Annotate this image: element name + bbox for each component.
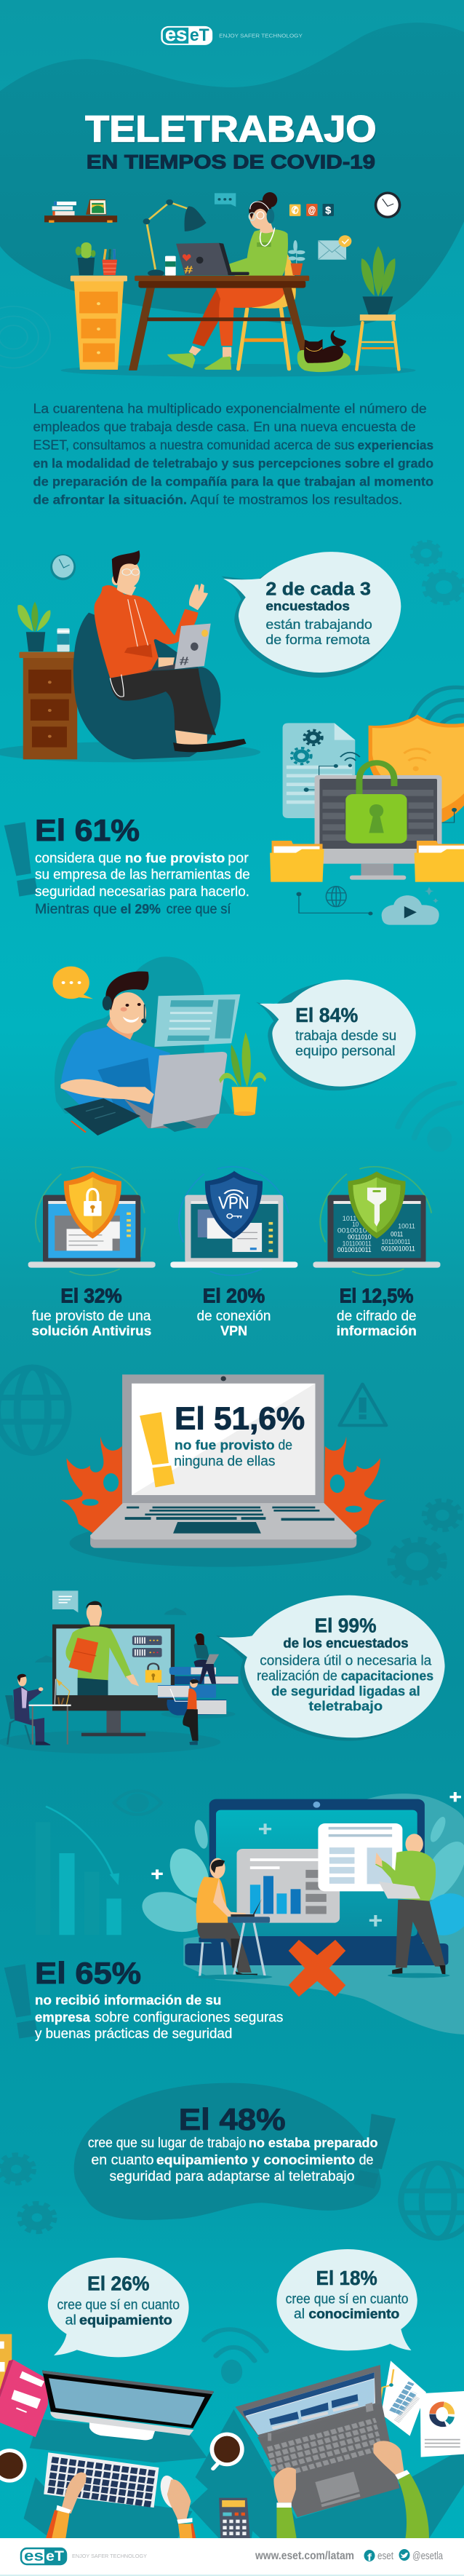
speech bubble: están trabajando [265, 617, 372, 632]
section: 65% [4, 1791, 464, 2041]
flame holes [82, 1473, 362, 1513]
monitor [52, 1625, 175, 1736]
laptop encryption: 101100011 [381, 1239, 411, 1246]
desk [129, 276, 309, 370]
woman standing [170, 1679, 199, 1745]
percent heading: El 51,6% [175, 1401, 305, 1436]
plus signs [151, 1792, 461, 1927]
description: no recibió información de su [35, 1993, 221, 2008]
speech bubble left: equipamiento [79, 2313, 172, 2328]
speech bubble: trabaja desde su [295, 1029, 396, 1043]
shadow [70, 1519, 372, 1567]
section: security tools [0, 1167, 440, 1453]
website: www.eset.com/latam [255, 2550, 354, 2562]
description: su empresa de las herramientas de [35, 868, 250, 882]
laptop [176, 243, 249, 276]
man with hoodie and laptop: # [180, 655, 189, 667]
faint eye [114, 1791, 161, 1815]
intro paragraph: de afrontar la situación. [33, 493, 187, 507]
desk lamp [143, 199, 207, 277]
title: TELETRABAJO [87, 109, 377, 151]
dark blob [55, 956, 233, 1114]
section: 99% [0, 1590, 445, 1753]
leaves left [135, 1819, 216, 1940]
speech bubble right: al [294, 2307, 305, 2321]
faint wifi [398, 1083, 460, 1138]
shelf with books and frame [44, 199, 117, 223]
faint gears [391, 1501, 460, 1582]
percent heading: El 65% [35, 1956, 141, 1990]
left hand on keyboard [46, 2473, 87, 2538]
cactus [76, 242, 95, 275]
percent heading: El 61% [35, 813, 140, 847]
faint wifi [204, 2329, 266, 2361]
intro paragraph: experiencias [358, 438, 433, 453]
laptop screen [122, 1374, 324, 1505]
description: considera que [35, 851, 121, 865]
security shield [369, 715, 464, 823]
globe icon [326, 887, 346, 907]
chat note [52, 1590, 78, 1612]
stats labels: El 32% [60, 1284, 122, 1307]
speech bubble left: El 26% [87, 2272, 149, 2295]
rings decoration [0, 306, 50, 368]
subtitle: EN TIEMPOS DE COVID-19 [87, 151, 375, 173]
stats labels [32, 1284, 151, 1339]
description: en cuanto [91, 2152, 154, 2168]
speech bubble: capacitaciones [341, 1668, 433, 1684]
faint globe [401, 2163, 464, 2238]
speech bubble: de forma remota [265, 633, 370, 647]
filing cabinet [71, 276, 127, 370]
header section [0, 23, 464, 377]
intro paragraph: Aquí te mostramos los resultados. [191, 493, 402, 507]
description: Mientras que [35, 902, 117, 916]
stats labels: solución Antivirus [32, 1324, 151, 1339]
footer [0, 2538, 464, 2576]
floor shadows [196, 1973, 449, 1979]
stat vpn: VPN [220, 1324, 247, 1339]
section: desks [0, 2249, 464, 2538]
description [35, 1993, 283, 2041]
description: ninguna de ellas [174, 1454, 275, 1469]
footer logo: eT [46, 2549, 64, 2564]
man with headset [60, 972, 170, 1114]
speech bubble right: cree que sí en cuanto [286, 2291, 409, 2307]
floating icons phone email dollar: @ [308, 205, 316, 216]
clouds [35, 1607, 186, 1662]
white card [318, 1823, 402, 1891]
speech bubble [216, 1596, 445, 1741]
floor shadow [0, 1730, 220, 1753]
speech bubble left: cree que sí en cuanto [57, 2297, 180, 2313]
intro paragraph [33, 402, 433, 507]
stat encryption: de cifrado de [337, 1309, 417, 1323]
floating icons phone email dollar: ✆ [292, 205, 299, 216]
faint gears [0, 2155, 54, 2232]
description [35, 851, 250, 916]
circuit and wifi icon [297, 753, 456, 915]
folders [270, 841, 464, 882]
section: 48% [0, 2083, 464, 2238]
pencil cup [102, 249, 117, 275]
keyboard [44, 2452, 159, 2508]
floating icons phone email dollar [289, 204, 334, 216]
laptop: # [184, 264, 193, 276]
chart panel [237, 1849, 340, 1923]
facebook [364, 2550, 394, 2563]
percent heading: El 48% [179, 2102, 286, 2136]
description: de [359, 2152, 374, 2168]
description: cree que su lugar de trabajo [88, 2136, 247, 2150]
description: y buenas prácticas de seguridad [35, 2026, 232, 2041]
footer logo [21, 2548, 66, 2564]
settings document [283, 723, 355, 818]
leaves right [413, 1815, 464, 1942]
standing man [375, 1834, 445, 1975]
ESET logo: es [165, 25, 187, 45]
red cross [289, 1940, 345, 1997]
potted plant on stool [356, 246, 399, 370]
laptop encryption: 10011 [398, 1223, 415, 1230]
description: de [278, 1438, 292, 1453]
laptop encryption: 0011 [391, 1231, 404, 1238]
laptop keyboard base [90, 1503, 356, 1548]
footer logo: es [24, 2548, 44, 2564]
calculator [219, 2498, 250, 2538]
wifi rings [409, 687, 464, 730]
beanbag [73, 613, 220, 759]
faint globe [0, 1368, 68, 1453]
cat on cushion [297, 330, 351, 372]
laptop encryption: 0010010 [337, 1227, 367, 1235]
laptop vpn [170, 1167, 297, 1275]
warning triangle [340, 1384, 386, 1425]
side table [19, 652, 81, 759]
cloud play icon [382, 887, 439, 925]
faint gears [412, 542, 463, 603]
speech bubble: realización de [257, 1668, 337, 1684]
yellow chat bubble [52, 967, 93, 999]
laptop right [235, 2365, 399, 2517]
exclamation mark [354, 2114, 396, 2189]
laptop encryption [313, 1167, 440, 1275]
donut chart [433, 2404, 452, 2424]
description: sobre configuraciones seguras [95, 2010, 283, 2025]
laptop encryption: 0010010011 [381, 1245, 415, 1253]
section: 61% [4, 687, 464, 925]
exclamation mark [4, 822, 38, 897]
facebook: eset [377, 2550, 394, 2562]
yellow exclamation [140, 1412, 175, 1487]
pink book [0, 2360, 48, 2437]
speech bubble right: conocimiento [308, 2307, 399, 2321]
stat encryption [337, 1284, 417, 1339]
tagline: ENJOY SAFER TECHNOLOGY [219, 32, 303, 39]
seated analyst [196, 1858, 270, 1976]
description: no fue provisto [175, 1438, 275, 1453]
description: empresa [35, 2010, 91, 2025]
coffee cups [0, 2433, 244, 2483]
laptop encryption: 0010010011 [337, 1247, 372, 1254]
dark blob [74, 2083, 381, 2220]
stat vpn [197, 1284, 271, 1339]
speech bubble: El 99% [315, 1614, 377, 1637]
speech bubble: de los encuestados [283, 1636, 409, 1651]
speech bubble left: al [65, 2313, 76, 2328]
hands on laptop [273, 2441, 429, 2538]
server panels [132, 1636, 162, 1657]
woman character with chair [167, 192, 296, 370]
laptop vpn: VPN [218, 1193, 249, 1213]
padlock [145, 1663, 161, 1683]
wall clock [375, 191, 401, 218]
envelope with check [318, 235, 351, 260]
description: no fue provisto [125, 851, 225, 865]
section: 2 de cada 3 [0, 542, 463, 762]
man with hoodie and laptop [94, 550, 247, 752]
mouse with hand [157, 2474, 196, 2538]
chat bubble [215, 193, 236, 207]
keyboard and notebook [63, 1098, 197, 1136]
instructor [65, 1601, 139, 1695]
description: no estaba preparado [249, 2136, 378, 2150]
speech bubble [221, 552, 401, 678]
ESET logo: eT [190, 25, 209, 45]
wall clock [50, 554, 76, 580]
woman on books [194, 1633, 219, 1684]
title: TELETRABAJO [85, 108, 377, 149]
twitter [399, 2549, 443, 2562]
description [88, 2136, 378, 2184]
big screen [185, 1799, 448, 1965]
twitter: @esetla [412, 2550, 443, 2562]
section: 84% [52, 956, 460, 1152]
ESET logo [162, 25, 212, 45]
monitor [42, 2371, 214, 2440]
speech bubble: de seguridad ligadas al [271, 1684, 420, 1699]
plant [219, 1032, 266, 1116]
description [174, 1438, 292, 1469]
stats labels: fue provisto de una [32, 1309, 151, 1323]
speech bubble: teletrabajo [308, 1699, 383, 1713]
header blob [0, 23, 464, 327]
description: equipamiento y conocimiento [156, 2152, 355, 2168]
speech bubble right [276, 2249, 417, 2350]
monitor [315, 775, 442, 880]
plant beside woman [288, 240, 305, 275]
coffee cup [165, 256, 176, 276]
stacked books [158, 1667, 239, 1716]
papers [380, 2361, 464, 2457]
desk shadows [24, 2409, 464, 2538]
description: seguridad necesarias para hacerlo. [35, 884, 249, 899]
floating icons phone email dollar: $ [325, 205, 332, 216]
seated man [5, 1674, 50, 1745]
description: seguridad para adaptarse al teletrabajo [110, 2169, 354, 2184]
faint bar chart [36, 1807, 121, 1935]
intro paragraph: ESET, consultamos a nuestra comunidad acerca de sus [33, 438, 354, 453]
stat encryption: El 12,5% [340, 1284, 413, 1307]
floating panel [154, 994, 240, 1047]
footer tagline: ENJOY SAFER TECHNOLOGY [72, 2553, 147, 2559]
description: el 29% [121, 902, 161, 916]
floor shadow [0, 742, 260, 762]
speech bubble right: El 18% [316, 2267, 377, 2289]
speech bubble: considera útil o necesaria la [260, 1654, 431, 1668]
speech bubble left [48, 2258, 189, 2357]
speech bubble: 2 de cada 3 [265, 578, 371, 599]
laptop encryption: 1011 [343, 1216, 357, 1223]
small desk with lamp [28, 1679, 71, 1745]
yellow folder [0, 2334, 12, 2390]
speech bubble [256, 980, 416, 1090]
speech bubble: El 84% [295, 1004, 358, 1026]
laptop antivirus [28, 1167, 156, 1275]
plant and cup [17, 602, 70, 651]
stat encryption: información [337, 1324, 417, 1339]
stat vpn: El 20% [203, 1284, 265, 1307]
laptop [124, 1052, 227, 1128]
description: cree que sí [167, 902, 231, 916]
laptop encryption: 0011010 [348, 1234, 372, 1241]
floor shadow [60, 364, 416, 377]
flames [60, 1436, 386, 1534]
facebook: f [367, 2551, 372, 2563]
laptop encryption: 101100011 [343, 1240, 372, 1248]
section: 51,6% laptop on fire [60, 1374, 460, 1582]
description: por [228, 851, 249, 865]
padlock [345, 763, 407, 844]
laptop encryption: 10 [352, 1221, 359, 1229]
speech bubble: equipo personal [295, 1044, 396, 1058]
speech bubble: encuestados [265, 599, 350, 614]
exclamation mark [4, 1964, 38, 2039]
light background blob [183, 1794, 464, 2034]
stat vpn: de conexión [197, 1309, 271, 1323]
